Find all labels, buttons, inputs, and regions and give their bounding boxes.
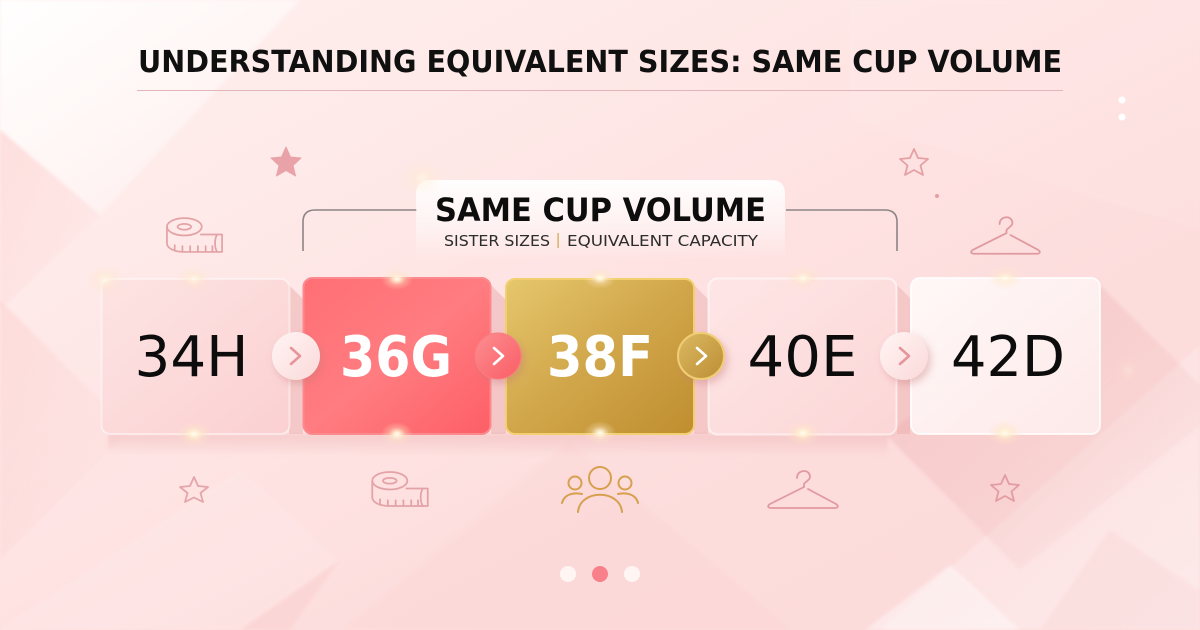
arrow button 1 [272, 332, 320, 380]
pagination dots [560, 566, 640, 582]
icon: outline star bottom left [180, 477, 208, 502]
icon: outline star bottom right [991, 475, 1019, 501]
card: 40E: 40E [748, 325, 858, 390]
card: 38F: 38F [547, 325, 653, 390]
card: 34H [102, 279, 290, 434]
icon: people [562, 467, 638, 512]
card: 38F [506, 279, 694, 434]
card: 42D: 42D [951, 325, 1065, 390]
card: 42D [911, 278, 1100, 434]
decorative dots [935, 96, 1126, 198]
callout subtitle: SISTER SIZES [444, 232, 550, 250]
title rule [137, 90, 1063, 91]
bracket [303, 210, 897, 251]
card: 36G: 36G [340, 325, 452, 390]
icon: filled star top left [271, 147, 301, 176]
icon: hanger top right [971, 217, 1040, 254]
arrow button 3 [678, 333, 724, 379]
callout subtitle [444, 232, 759, 250]
icon: hanger bottom [768, 471, 838, 508]
card glows [85, 160, 1144, 447]
callout heading: SAME CUP VOLUME [435, 191, 766, 229]
card diagonal shadows [108, 285, 1200, 570]
icon: tape measure bottom [372, 472, 428, 506]
callout: same cup volume [416, 180, 785, 260]
callout subtitle: EQUIVALENT CAPACITY [567, 232, 759, 250]
arrow button 4 [880, 332, 928, 380]
icon: outline star top right [900, 149, 928, 175]
card: 40E [708, 278, 896, 434]
arrow button 2 [475, 333, 521, 379]
icon: tape measure top left [167, 218, 222, 252]
card: 34H: 34H [134, 325, 248, 390]
title: UNDERSTANDING EQUIVALENT SIZES: SAME CUP VOLUME [138, 45, 1062, 80]
card: 36G [304, 278, 490, 434]
